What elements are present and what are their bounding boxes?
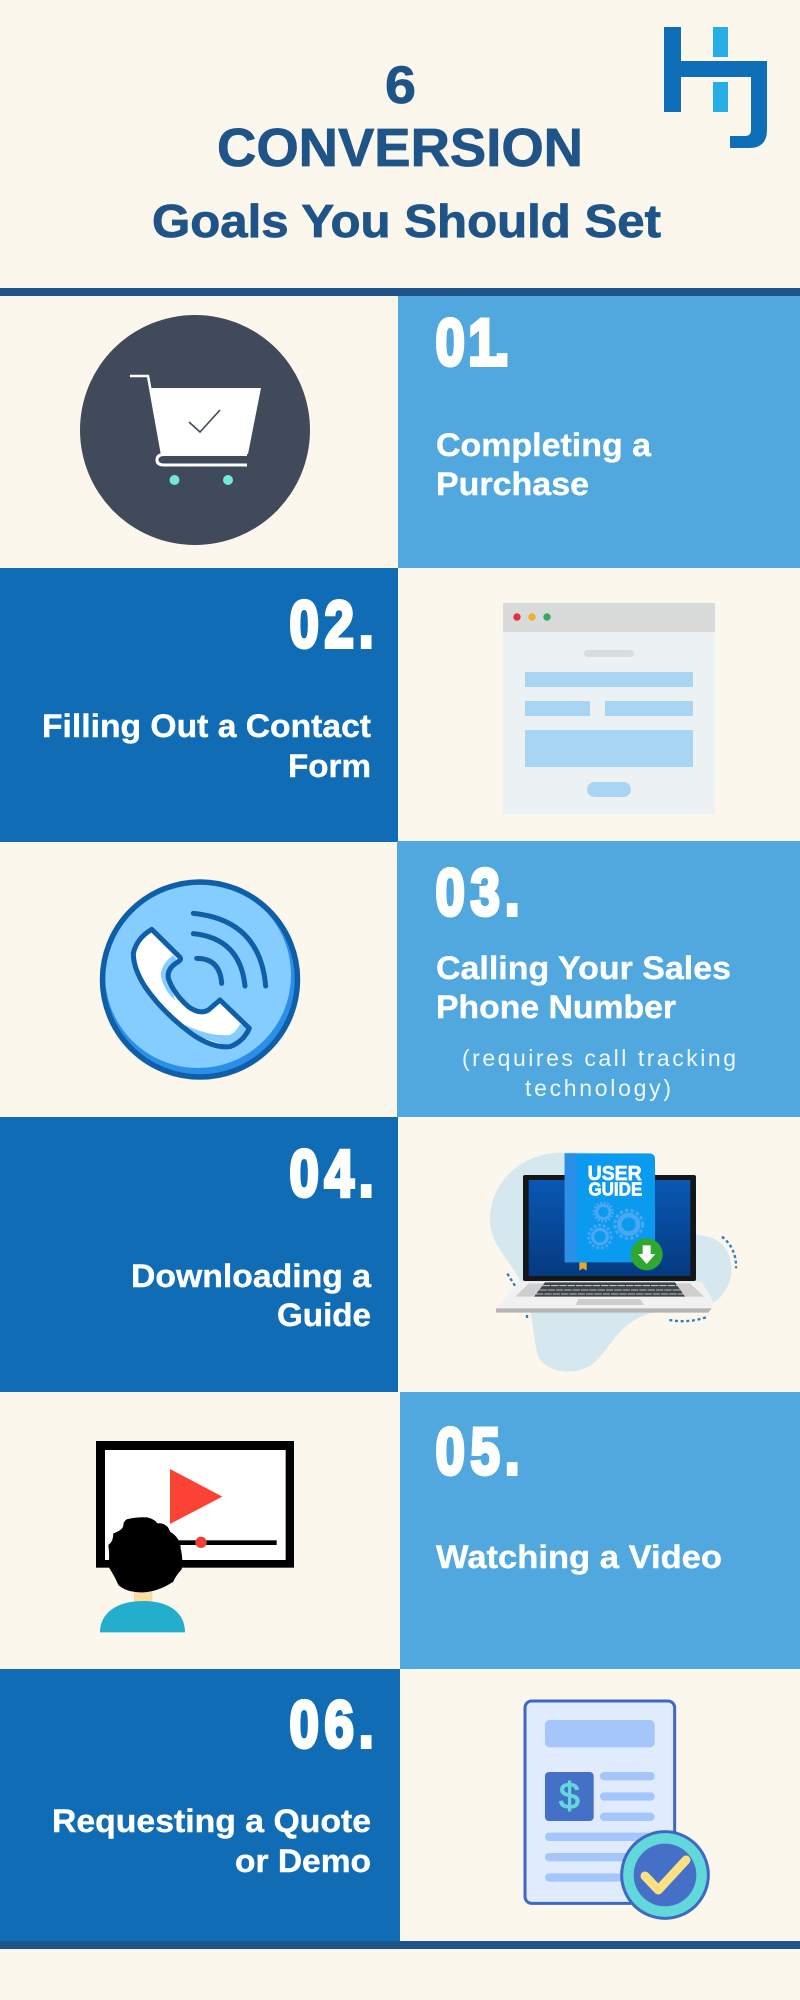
panel: 02 filling out a contact form bbox=[0, 568, 398, 842]
text: completing a purchase: Purchase bbox=[436, 466, 589, 502]
title: 6 bbox=[385, 56, 416, 115]
text: call tracking note bbox=[462, 1045, 736, 1101]
text: watching a video: Watching a Video bbox=[436, 1539, 722, 1575]
title bbox=[152, 56, 661, 247]
panel: 03 calling your sales phone number bbox=[397, 841, 800, 1117]
text: downloading a guide: Downloading a bbox=[131, 1258, 371, 1294]
text: downloading a guide bbox=[131, 1258, 371, 1333]
text: filling out a contact form: Filling Out a Contact bbox=[42, 708, 371, 744]
logo: HJ monogram bbox=[664, 27, 767, 148]
icon: laptop with user guide bbox=[490, 1152, 736, 1372]
number 04: 04. bbox=[290, 1136, 374, 1210]
text: filling out a contact form: Form bbox=[288, 748, 371, 784]
icon: web form bbox=[503, 603, 715, 814]
panel: 01 completing a purchase bbox=[398, 296, 800, 568]
bottom divider band bbox=[0, 1941, 800, 1949]
icon: phone call bbox=[102, 882, 298, 1077]
text: requesting a quote or demo bbox=[52, 1803, 371, 1879]
label: user guide: GUIDE bbox=[588, 1179, 642, 1200]
label: user guide bbox=[588, 1162, 642, 1200]
title: CONVERSION bbox=[217, 118, 583, 178]
text: completing a purchase: Completing a bbox=[436, 427, 651, 463]
text: requesting a quote or demo: Requesting a Quote bbox=[52, 1803, 371, 1839]
icon: person watching video bbox=[96, 1441, 294, 1632]
panel: 06 requesting a quote or demo bbox=[0, 1669, 400, 1942]
top divider band bbox=[0, 288, 800, 296]
text: calling your sales phone number bbox=[436, 950, 731, 1025]
number 01: 01. bbox=[436, 305, 509, 379]
text: downloading a guide: Guide bbox=[277, 1297, 371, 1333]
number 06: 06. bbox=[290, 1687, 374, 1761]
text: call tracking note: (requires call tracking bbox=[462, 1045, 736, 1071]
text: filling out a contact form bbox=[42, 708, 371, 784]
text: calling your sales phone number: Phone Number bbox=[436, 989, 676, 1025]
panel: 05 watching a video bbox=[400, 1392, 800, 1669]
number 02: 02. bbox=[290, 587, 374, 661]
text: completing a purchase bbox=[436, 427, 651, 502]
title: Goals You Should Set bbox=[152, 195, 661, 247]
icon: shopping cart bbox=[80, 315, 310, 545]
icon: quote document bbox=[525, 1701, 708, 1918]
icon: quote document: $ bbox=[559, 1775, 580, 1817]
panel: 04 downloading a guide bbox=[0, 1117, 398, 1392]
text: requesting a quote or demo: or Demo bbox=[235, 1843, 371, 1879]
text: calling your sales phone number: Calling Your Sales bbox=[436, 950, 731, 986]
number 05: 05. bbox=[436, 1414, 520, 1488]
label: user guide: USER bbox=[588, 1162, 642, 1185]
number 03: 03. bbox=[436, 855, 520, 929]
text: call tracking note: technology) bbox=[525, 1075, 671, 1101]
